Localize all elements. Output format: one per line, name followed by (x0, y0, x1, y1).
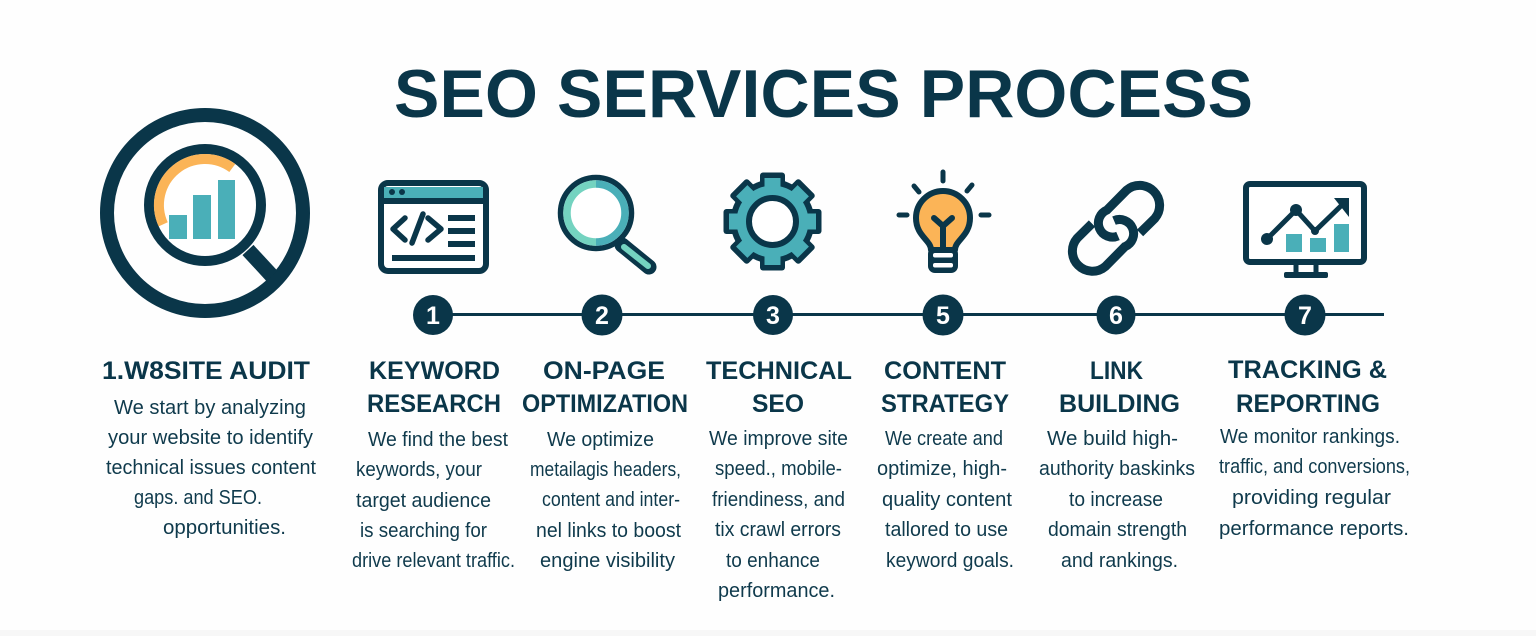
column: tracking and reporting (1219, 356, 1410, 540)
column: on-page optimization: engine visibility (540, 550, 675, 572)
column: technical seo: to enhance (726, 550, 820, 572)
step number 6 (1096, 296, 1136, 334)
column: content strategy: STRATEGY (881, 390, 1009, 418)
column: on-page optimization: content and inter- (542, 489, 680, 511)
icon: website audit magnifier (107, 115, 303, 311)
column: on-page optimization: ON-PAGE (543, 357, 665, 385)
column: on-page optimization: nel links to boost (536, 520, 681, 542)
step number 6: 6 (1109, 302, 1123, 330)
step number 3 (753, 295, 793, 335)
column: website audit: 1.W8SITE AUDIT (102, 357, 310, 385)
step number 3: 3 (766, 302, 780, 330)
column: link building (1039, 357, 1195, 572)
step number 2 (582, 294, 622, 336)
column: link building: authority baskinks (1039, 458, 1195, 480)
column: website audit: We start by analyzing (114, 397, 306, 419)
column: content strategy: optimize, high- (877, 458, 1007, 480)
step number 2: 2 (595, 302, 609, 330)
column: website audit: your website to identify (108, 427, 313, 449)
column: keyword research: target audience (356, 490, 491, 512)
column: keyword research: is searching for (360, 520, 487, 542)
column: content strategy: tallored to use (885, 519, 1008, 541)
column: website audit: technical issues content (106, 457, 316, 479)
column: keyword research: keywords, your (356, 459, 482, 481)
column: technical seo: SEO (752, 390, 804, 418)
column: technical seo: We improve site (709, 428, 848, 450)
title: SEO SERVICES PROCESS (394, 56, 1253, 132)
step number 5: 5 (936, 302, 950, 330)
icon: on-page magnifier (560, 178, 649, 267)
icon: browser code window (381, 183, 486, 271)
column: keyword research (352, 357, 515, 572)
column: technical seo: speed., mobile- (715, 458, 842, 480)
column: link building: and rankings. (1061, 550, 1178, 572)
step number 7: 7 (1298, 302, 1312, 330)
step number 1 (413, 295, 453, 335)
column: keyword research: KEYWORD (369, 357, 500, 385)
icon: light bulb (899, 172, 989, 273)
column: tracking and reporting: providing regular (1232, 487, 1391, 509)
column: content strategy: quality content (882, 489, 1012, 511)
column: link building: We build high- (1047, 428, 1178, 450)
column: content strategy: CONTENT (884, 357, 1006, 385)
column: content strategy: We create and (885, 428, 1003, 450)
column: website audit: gaps. and SEO. (134, 487, 262, 509)
icon: chain link (1072, 185, 1160, 271)
column: keyword research: drive relevant traffic. (352, 550, 515, 572)
column: on-page optimization: metailagis headers, (530, 459, 681, 481)
column: tracking and reporting: We monitor rankings. (1220, 426, 1400, 448)
step number 1: 1 (426, 302, 440, 330)
column: tracking and reporting: performance reports. (1219, 518, 1409, 540)
column: keyword research: We find the best (368, 429, 508, 451)
column: on-page optimization: OPTIMIZATION (522, 390, 688, 418)
column: link building: to increase (1069, 489, 1163, 511)
column: technical seo: friendiness, and (712, 489, 845, 511)
column: website audit: opportunities. (163, 517, 286, 539)
column: link building: LINK (1090, 357, 1143, 385)
step number 5 (922, 294, 964, 336)
column: content strategy (877, 357, 1014, 572)
column: content strategy: keyword goals. (886, 550, 1014, 572)
column: technical seo: performance. (718, 580, 835, 602)
icon: gear (724, 172, 822, 270)
column: on-page optimization: We optimize (547, 429, 654, 451)
column: tracking and reporting: traffic, and conversions, (1219, 456, 1410, 478)
column: keyword research: RESEARCH (367, 390, 501, 418)
column: on-page optimization (522, 357, 688, 572)
column: link building: domain strength (1048, 519, 1187, 541)
column: tracking and reporting: TRACKING & (1228, 356, 1387, 384)
column: link building: BUILDING (1059, 390, 1180, 418)
step number 7 (1284, 294, 1326, 336)
column: technical seo: TECHNICAL (706, 357, 852, 385)
column: website audit (102, 357, 316, 539)
column: technical seo: tix crawl errors (715, 519, 841, 541)
column: tracking and reporting: REPORTING (1236, 390, 1380, 418)
icon: monitor with chart (1246, 184, 1364, 278)
column: technical seo (706, 357, 852, 602)
timeline line (433, 313, 1384, 316)
